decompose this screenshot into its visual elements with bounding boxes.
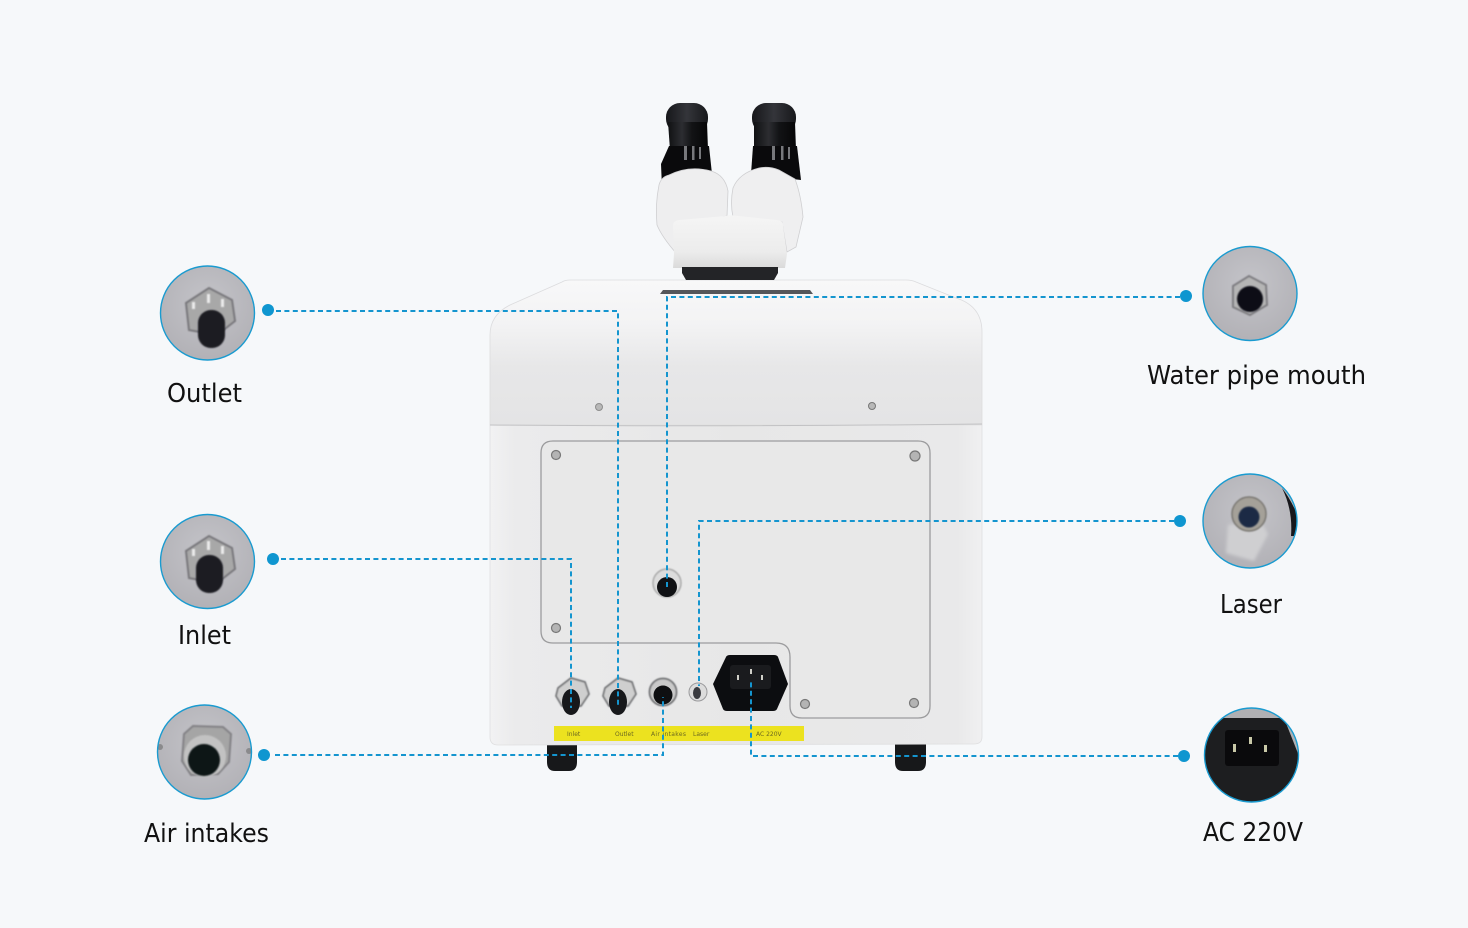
yellow connector label strip: AC 220V (756, 731, 783, 738)
inlet connector (556, 678, 589, 715)
label: Inlet (178, 621, 231, 651)
leader line: water pipe mouth (667, 297, 1180, 590)
label: AC 220V (1203, 818, 1303, 848)
connector dot (258, 749, 270, 761)
air intakes connector (650, 678, 676, 706)
yellow connector label strip (554, 726, 804, 741)
outlet connector (603, 678, 636, 715)
connector dot (1178, 750, 1190, 762)
callout: AC 220V (1178, 708, 1303, 848)
callout: air intakes (144, 705, 270, 849)
right eyepiece (751, 103, 801, 180)
machine (490, 103, 982, 771)
panel screws (552, 450, 920, 708)
detail photo: inlet (160, 514, 255, 609)
connector dot (262, 304, 274, 316)
AC power socket (713, 655, 788, 711)
detail photo: air intakes (157, 705, 252, 800)
detail photo: laser (1203, 474, 1298, 569)
connector dot (1174, 515, 1186, 527)
laser connector (689, 683, 707, 701)
detail photo: water pipe mouth (1203, 246, 1298, 341)
yellow connector label strip: Laser (693, 731, 710, 738)
label: Air intakes (144, 819, 269, 849)
callout: outlet (160, 266, 274, 409)
right white arm (732, 167, 803, 252)
leader line: laser (699, 521, 1174, 686)
connector dot (267, 553, 279, 565)
label: Water pipe mouth (1147, 361, 1366, 391)
yellow connector label strip: Outlet (615, 731, 634, 738)
callout: laser (1174, 474, 1298, 620)
left eyepiece (661, 103, 712, 188)
leader line: AC 220V (751, 680, 1178, 756)
connector dot (1180, 290, 1192, 302)
rear access panel (541, 441, 930, 718)
yellow connector label strip: Air intakes (651, 731, 686, 738)
machine body (490, 280, 982, 745)
leader line: air intakes (275, 697, 663, 755)
machine feet (547, 744, 926, 771)
callout: water pipe mouth (1147, 246, 1366, 391)
detail photo: outlet (160, 266, 255, 360)
leader line: inlet (281, 559, 571, 708)
water pipe mouth connector (653, 569, 681, 597)
yellow connector label strip: Inlet (567, 731, 581, 738)
label: Outlet (167, 379, 242, 409)
leader line: outlet (276, 311, 618, 708)
label: Laser (1220, 590, 1282, 620)
detail photo: AC 220V (1204, 708, 1299, 804)
binocular microscope head (656, 103, 803, 280)
left white arm (656, 169, 728, 253)
callout: inlet (160, 514, 279, 651)
